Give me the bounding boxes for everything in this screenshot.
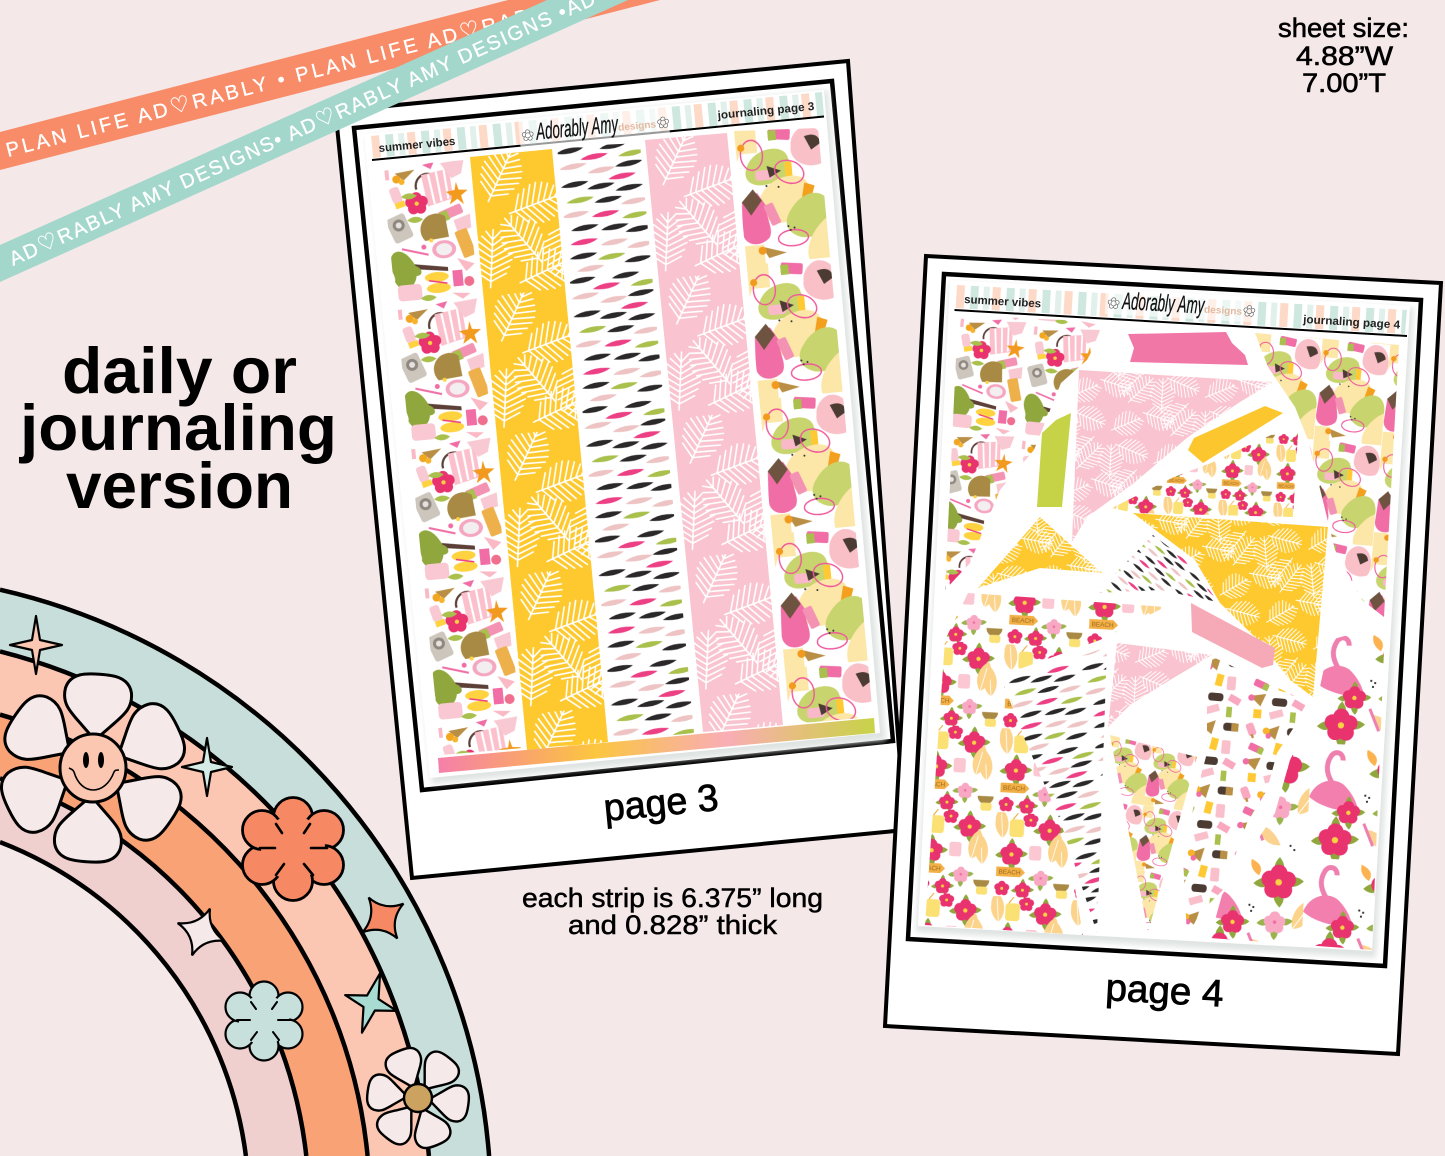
logo page 3: designs — [618, 119, 657, 134]
header strip page 4 — [954, 285, 1407, 336]
icon: peach sparkle — [10, 616, 62, 674]
torn piece: flamingos — [1210, 625, 1385, 950]
torn piece: brush strokes large — [1003, 647, 1107, 933]
torn piece: ice cream blobs right — [1255, 333, 1399, 617]
sticker strip 3: brush strokes — [557, 143, 694, 741]
note: sheet size: 4.88”W — [1296, 41, 1394, 71]
logo page 3: ✿ — [656, 114, 670, 132]
header label: journaling page 4: journaling page 4 — [1302, 314, 1401, 332]
logo page 3: ✿ — [521, 127, 535, 145]
gradient bar — [438, 718, 875, 773]
torn piece: flowers and beach left — [925, 593, 1165, 935]
washi swatch: light pink — [1191, 603, 1275, 668]
torn piece: ice cream blobs bottom — [1110, 735, 1197, 932]
washi swatch: pink — [1128, 332, 1248, 365]
note: strip size — [522, 883, 823, 940]
icon: white sparkle — [169, 900, 233, 964]
torn piece: yellow palm large — [1133, 513, 1328, 697]
heading: daily or journaling version — [18, 334, 337, 522]
icon: teal sparkle — [336, 965, 406, 1041]
icon: blue flower — [226, 982, 302, 1060]
sticker strip 4: pink palm — [645, 133, 783, 732]
logo page 4: Adorably Amy — [1121, 288, 1206, 320]
card: page 3 — [336, 61, 905, 878]
logo page 3: Adorably Amy — [534, 111, 620, 146]
heading: daily or journaling version: journaling — [18, 391, 337, 464]
torn piece: pink palm small — [1108, 643, 1212, 727]
heading: daily or journaling version: version — [66, 449, 293, 522]
torn piece: yellow palm small — [978, 517, 1102, 588]
torn piece: pink palm — [1072, 370, 1273, 542]
icon: coral flower — [242, 798, 344, 900]
sticker strip 1: summer icons — [382, 160, 523, 755]
note: strip size: each strip is 6.375” long — [522, 883, 823, 913]
note: sheet size: 7.00”T — [1302, 68, 1386, 98]
icon: coral sparkle — [348, 883, 418, 953]
sticker strip 5: ice cream blobs — [734, 128, 873, 724]
sticker strip 2: yellow palm — [470, 149, 608, 750]
washi swatch: green — [1037, 413, 1071, 507]
logo page 4: ✿ — [1243, 303, 1256, 321]
rainbow — [0, 590, 489, 1156]
icon: smiley daisy — [0, 672, 192, 864]
header label: summer vibes: summer vibes — [378, 136, 456, 155]
label: page 4: page 4 — [1104, 967, 1225, 1016]
header strip page 3 — [371, 92, 824, 160]
washi swatch: yellow — [1188, 406, 1283, 463]
torn piece: summer icons — [945, 315, 1107, 590]
heading: daily or journaling version: daily or — [62, 334, 297, 407]
torn piece: beach flowers — [1112, 433, 1298, 517]
logo page 4: designs — [1204, 305, 1243, 318]
torn piece: brush strokes small — [1096, 535, 1218, 602]
icon: mint sparkle — [182, 738, 232, 796]
note: sheet size: sheet size: — [1278, 13, 1409, 43]
header label: journaling page 3: journaling page 3 — [716, 101, 815, 122]
logo page 4: ✿ — [1107, 295, 1120, 313]
label: page 3: page 3 — [602, 777, 720, 830]
torn piece: ice cream icons — [1183, 657, 1310, 937]
card: page 4 — [885, 256, 1441, 1054]
header label: summer vibes: summer vibes — [964, 294, 1041, 310]
note: strip size: and 0.828” thick — [568, 910, 778, 940]
icon: bottom daisy — [365, 1044, 471, 1152]
note: sheet size — [1278, 13, 1409, 98]
